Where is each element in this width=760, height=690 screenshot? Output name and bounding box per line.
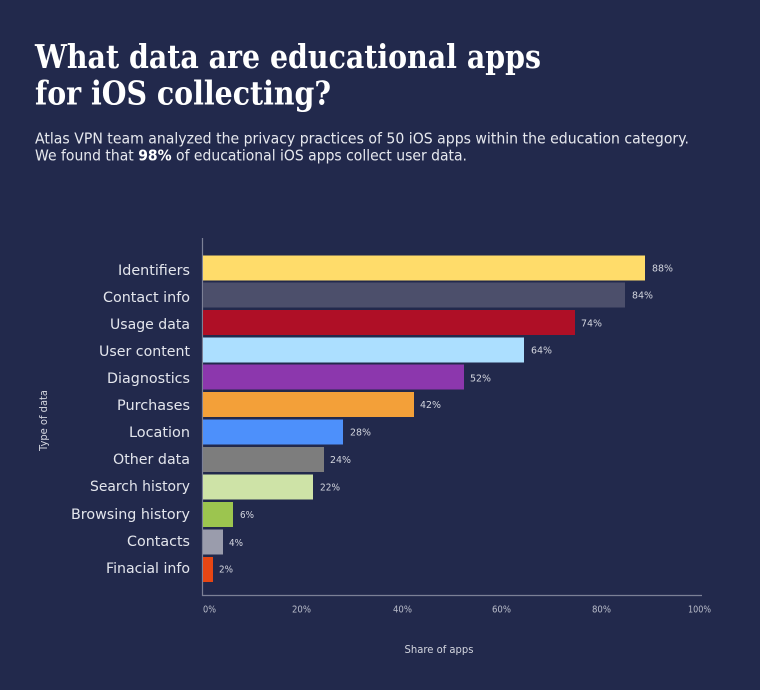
value labels <box>219 264 673 576</box>
category labels: Usage data <box>110 317 190 333</box>
category labels: Contact info <box>103 290 190 306</box>
value labels: 4% <box>229 538 243 549</box>
value labels: 52% <box>470 374 491 384</box>
value labels: 6% <box>240 510 254 521</box>
title: What data are educational apps <box>34 37 541 76</box>
bar chart <box>38 238 711 656</box>
title <box>34 37 541 112</box>
value labels: 24% <box>330 455 351 466</box>
category labels: Location <box>129 425 190 441</box>
value labels: 28% <box>350 428 371 438</box>
value labels: 64% <box>531 346 552 356</box>
category labels: User content <box>99 344 191 360</box>
category labels <box>71 263 191 577</box>
intro text: We found that 98% of educational iOS apps collect user data. <box>35 146 467 164</box>
category labels: Purchases <box>117 398 190 414</box>
title: for iOS collecting? <box>35 74 331 112</box>
x axis ticks: 20% <box>292 604 311 616</box>
category labels: Other data <box>113 452 190 468</box>
x axis ticks: 0% <box>203 604 216 616</box>
x axis ticks: 40% <box>393 604 412 616</box>
value labels: 74% <box>581 318 602 330</box>
value labels: 88% <box>652 264 673 274</box>
x axis ticks: 100% <box>688 604 711 616</box>
value labels: 42% <box>420 400 441 411</box>
value labels: 22% <box>320 482 340 494</box>
category labels: Contacts <box>127 534 190 550</box>
category labels: Identifiers <box>118 263 190 279</box>
axes <box>202 238 702 596</box>
intro text: Atlas VPN team analyzed the privacy practices of 50 iOS apps within the education category. <box>35 130 689 148</box>
x axis ticks: 80% <box>592 604 611 616</box>
x axis title: Share of apps <box>404 644 474 656</box>
category labels: Diagnostics <box>107 371 190 387</box>
category labels: Search history <box>90 479 190 495</box>
bars <box>203 256 645 582</box>
value labels: 2% <box>219 564 233 576</box>
x axis ticks <box>203 604 711 616</box>
intro text <box>35 130 689 164</box>
value labels: 84% <box>632 290 653 302</box>
category labels: Finacial info <box>106 561 190 577</box>
x axis ticks: 60% <box>492 604 511 616</box>
category labels: Browsing history <box>71 507 190 523</box>
y axis title: Type of data <box>38 390 50 452</box>
